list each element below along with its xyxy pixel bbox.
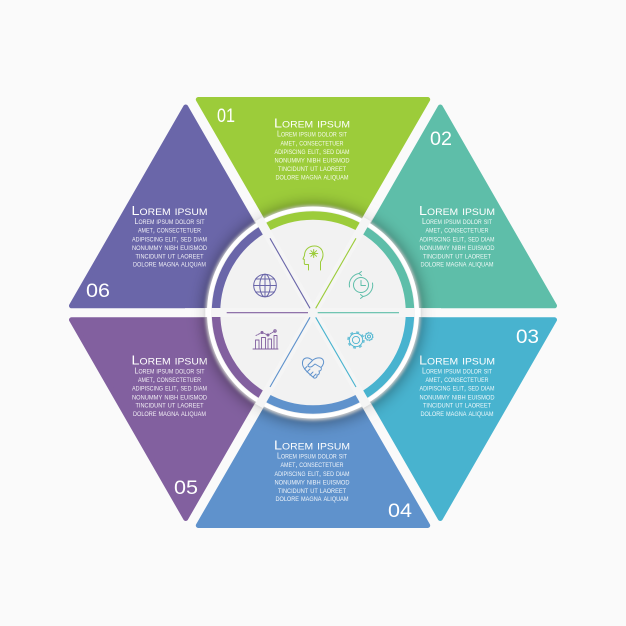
text block 01: nonummy nibh euismod: [274, 156, 350, 165]
text block 03: dolore magna aliquam: [420, 409, 494, 418]
number 01: 01: [217, 105, 235, 127]
text block 06: amet, consectetuer: [138, 226, 202, 235]
icon: globe: [254, 274, 276, 297]
number 05: 05: [174, 477, 198, 499]
icon: clock with arrows: [349, 272, 373, 298]
text block 02: dolore magna aliquam: [420, 260, 494, 269]
text block 02: adipiscing elit, sed diam: [420, 234, 494, 243]
ring segment: purple: [216, 312, 264, 396]
panel 05: purple triangle: [72, 320, 300, 518]
central hub: [205, 206, 421, 420]
icon: handshake heart: [302, 358, 324, 378]
number 06: 06: [86, 280, 110, 302]
text block 03: amet, consectetuer: [426, 375, 489, 384]
text block 01: [274, 117, 350, 181]
text block 06: [132, 204, 208, 269]
number 03: 03: [516, 326, 539, 348]
text block 03: Lorem ipsum dolor sit: [422, 366, 492, 375]
icon: bar chart: [253, 330, 278, 349]
panel 01: green triangle: [198, 100, 428, 298]
text block 06: dolore magna aliquam: [133, 260, 206, 269]
ring segment: blue: [264, 396, 362, 409]
text block 02: Lorem ipsum: [419, 204, 495, 218]
text block 05: adipiscing elit, sed diam: [132, 384, 207, 393]
text block 05: tincidunt ut laoreet: [136, 401, 204, 410]
text block 04: adipiscing elit, sed diam: [274, 469, 350, 478]
text block 03: adipiscing elit, sed diam: [420, 384, 494, 393]
text block 02: Lorem ipsum dolor sit: [422, 217, 492, 226]
text block 04: Lorem ipsum: [274, 438, 350, 452]
text block 03: nonummy nibh euismod: [420, 392, 495, 401]
divider line: green: [316, 238, 356, 308]
panel 03: cyan triangle: [326, 320, 554, 518]
ring segment: green: [264, 216, 362, 228]
text block 05: Lorem ipsum dolor sit: [134, 366, 205, 375]
text block 04: tincidunt ut laoreet: [278, 486, 346, 495]
divider line: teal: [318, 312, 399, 314]
text block 05: amet, consectetuer: [138, 375, 202, 384]
text block 05: [132, 353, 208, 418]
ring segment: teal: [362, 228, 410, 312]
divider line: cyan: [316, 317, 356, 387]
text block 04: dolore magna aliquam: [276, 494, 348, 503]
text block 02: tincidunt ut laoreet: [423, 251, 491, 260]
text block 01: adipiscing elit, sed diam: [274, 147, 350, 156]
ring segment: cyan: [362, 312, 410, 396]
text block 02: amet, consectetuer: [426, 226, 489, 235]
panel 06: indigo triangle: [72, 107, 300, 306]
text block 02: nonummy nibh euismod: [420, 243, 495, 252]
text block 06: Lorem ipsum: [132, 204, 208, 218]
text block 04: [274, 438, 350, 503]
text block 03: Lorem ipsum: [419, 353, 495, 367]
text block 04: Lorem ipsum dolor sit: [277, 452, 347, 460]
text block 02: [419, 204, 495, 269]
text block 03: tincidunt ut laoreet: [423, 401, 491, 410]
panel 02: teal triangle: [326, 107, 554, 306]
text block 05: dolore magna aliquam: [133, 409, 206, 418]
text block 06: adipiscing elit, sed diam: [132, 234, 207, 243]
text block 05: nonummy nibh euismod: [132, 392, 208, 401]
number 02: 02: [430, 128, 452, 150]
text block 04: amet, consectetuer: [280, 460, 344, 469]
ring segment: indigo: [216, 228, 264, 312]
text block 01: Lorem ipsum dolor sit: [277, 130, 347, 139]
text block 01: amet, consectetuer: [280, 138, 344, 147]
text block 01: dolore magna aliquam: [276, 172, 348, 181]
text block 06: nonummy nibh euismod: [132, 243, 208, 252]
number 04: 04: [388, 500, 412, 522]
text block 03: [419, 353, 495, 418]
text block 05: Lorem ipsum: [132, 353, 208, 367]
divider line: blue: [270, 317, 310, 387]
divider line: indigo: [270, 238, 310, 308]
text block 06: Lorem ipsum dolor sit: [134, 217, 205, 226]
text block 01: Lorem ipsum: [274, 117, 350, 131]
text block 06: tincidunt ut laoreet: [136, 251, 204, 260]
central circle shadow: [204, 205, 422, 423]
panel 04: blue triangle: [198, 327, 428, 526]
divider line: purple: [227, 312, 308, 314]
icon: gears: [348, 332, 373, 348]
icon: head with idea: [303, 246, 323, 270]
text block 01: tincidunt ut laoreet: [278, 164, 346, 173]
text block 04: nonummy nibh euismod: [274, 478, 350, 486]
